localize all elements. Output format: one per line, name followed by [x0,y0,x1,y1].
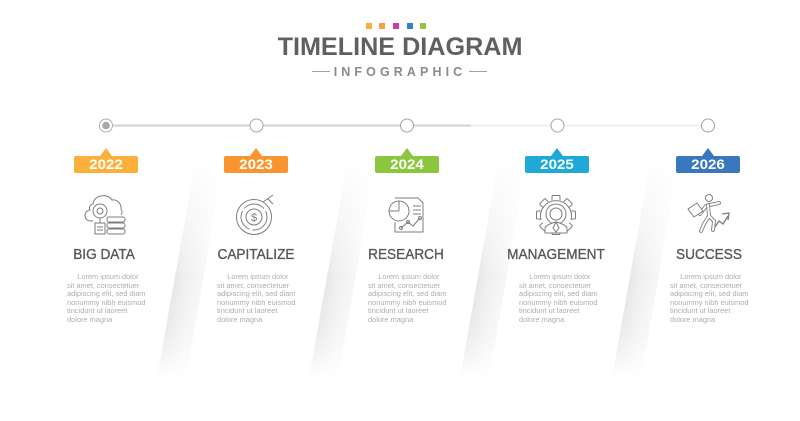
text: column 5: Lorem ipsum dolor sit amet, consectetuer adipiscing elit, sed diam nonummy nibh euismod tincidunt ut laoreet dolore magna [670,272,748,324]
tag 2024: 2024 [390,156,424,172]
tag 2024 [375,148,439,173]
heading: management: MANAGEMENT [507,247,604,263]
tag 2025: 2025 [540,156,574,172]
subtitle: INFOGRAPHIC [334,65,466,79]
icon: running businessman [687,194,730,233]
text: column 1: Lorem ipsum dolor sit amet, consectetuer adipiscing elit, sed diam nonummy nibh euismod tincidunt ut laoreet dolore magna [67,272,145,324]
title colour dots [366,23,426,29]
icon: dollar target: $ [251,212,257,224]
heading: big data: BIG DATA [73,247,134,263]
heading: capitalize: CAPITALIZE [217,247,294,263]
text: column 2: Lorem ipsum dolor sit amet, consectetuer adipiscing elit, sed diam nonummy nibh euismod tincidunt ut laoreet dolore magna [217,272,295,324]
icon: dollar target [236,194,274,235]
tag 2023 [224,148,288,173]
background shadows [160,214,660,361]
tag 2025 [525,148,589,173]
tag 2022: 2022 [89,156,123,172]
tag 2022 [74,148,138,173]
text: column 4: Lorem ipsum dolor sit amet, consectetuer adipiscing elit, sed diam nonummy nibh euismod tincidunt ut laoreet dolore magna [519,272,597,324]
text: column 3: Lorem ipsum dolor sit amet, consectetuer adipiscing elit, sed diam nonummy nibh euismod tincidunt ut laoreet dolore magna [368,272,446,324]
tag 2026: 2026 [691,156,725,172]
timeline [99,118,715,132]
tag 2023: 2023 [239,156,273,172]
icon: cloud data [84,195,126,234]
tag 2026 [676,148,740,173]
icon: gear person [536,195,576,235]
title: TIMELINE DIAGRAM [278,33,522,61]
heading: research: RESEARCH [368,247,443,263]
heading: success: SUCCESS [676,247,741,263]
icon: report [388,198,424,232]
